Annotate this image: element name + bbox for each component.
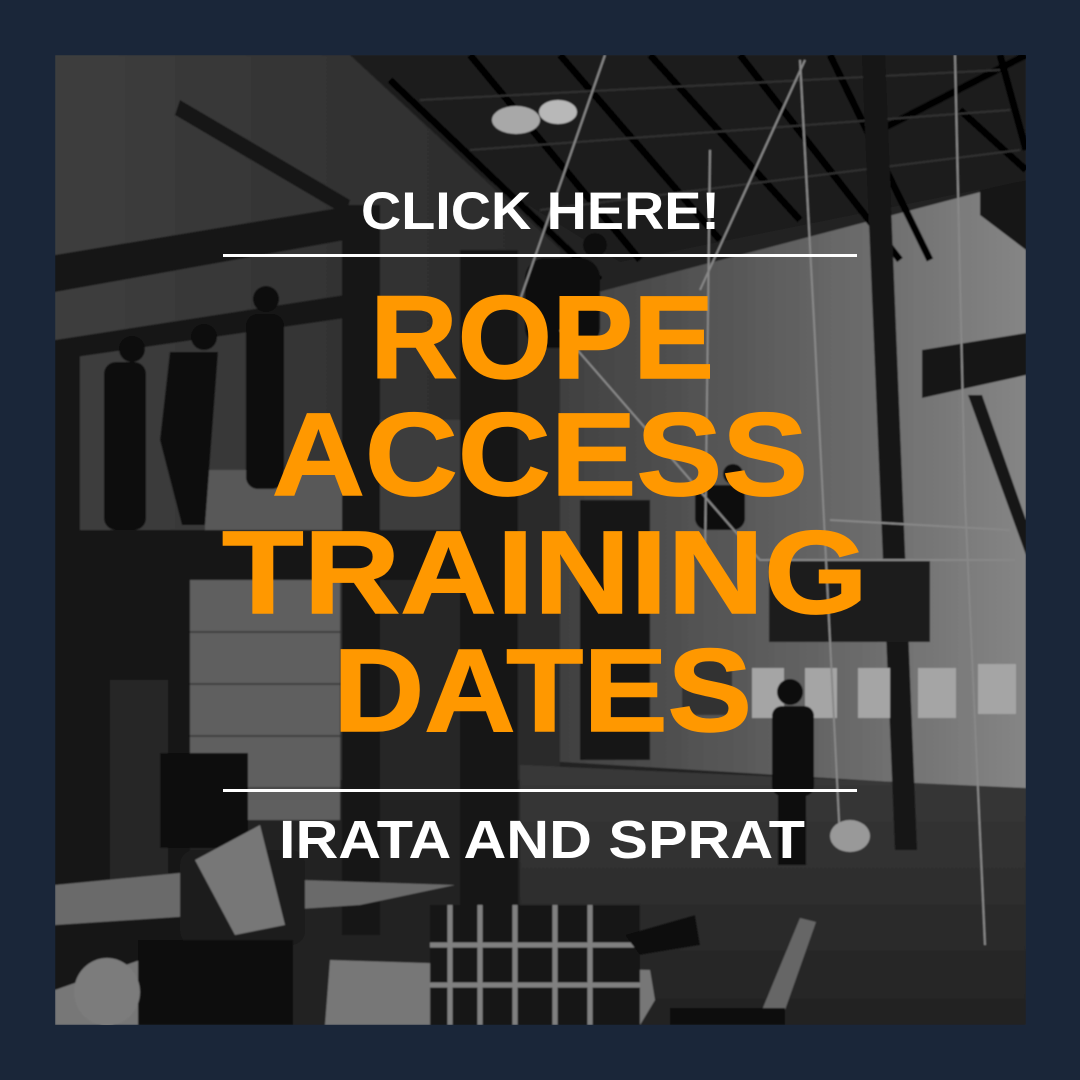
ropes [520, 55, 1015, 945]
workers on platform [104, 286, 284, 530]
title: rope access training dates: TRAINING [222, 507, 868, 639]
right platform and brace [922, 180, 1026, 555]
steel structure [55, 100, 650, 935]
heading: click here: CLICK HERE! [361, 182, 720, 241]
floor [520, 766, 1026, 954]
title: rope access training dates: DATES [333, 625, 752, 757]
wall posters [682, 660, 1016, 718]
top divider line [223, 254, 857, 257]
storage rack [110, 680, 168, 880]
left wall [55, 55, 560, 780]
photo base [190, 152, 998, 1025]
tables [55, 872, 655, 1025]
climbers on ropes [525, 233, 745, 530]
title: rope access training dates: ACCESS [272, 389, 808, 521]
tower mid panels [380, 420, 460, 530]
banner on wall [769, 560, 930, 642]
main right column [862, 55, 917, 850]
garage door [190, 580, 340, 820]
chairs and clothing [74, 825, 816, 1026]
title: rope access training dates: ROPE [370, 272, 714, 404]
standing person [772, 679, 814, 865]
left lower dark area [55, 579, 190, 988]
ball on floor [830, 820, 870, 852]
ceiling [350, 55, 1026, 280]
subtitle: irata and sprat: IRATA AND SPRAT [279, 810, 805, 870]
title: rope access training dates [222, 272, 868, 757]
back wall [530, 180, 1026, 790]
upper white door strip [205, 470, 345, 530]
ceiling lights [492, 100, 577, 134]
bottom divider line [223, 789, 857, 792]
monitor [160, 753, 248, 848]
